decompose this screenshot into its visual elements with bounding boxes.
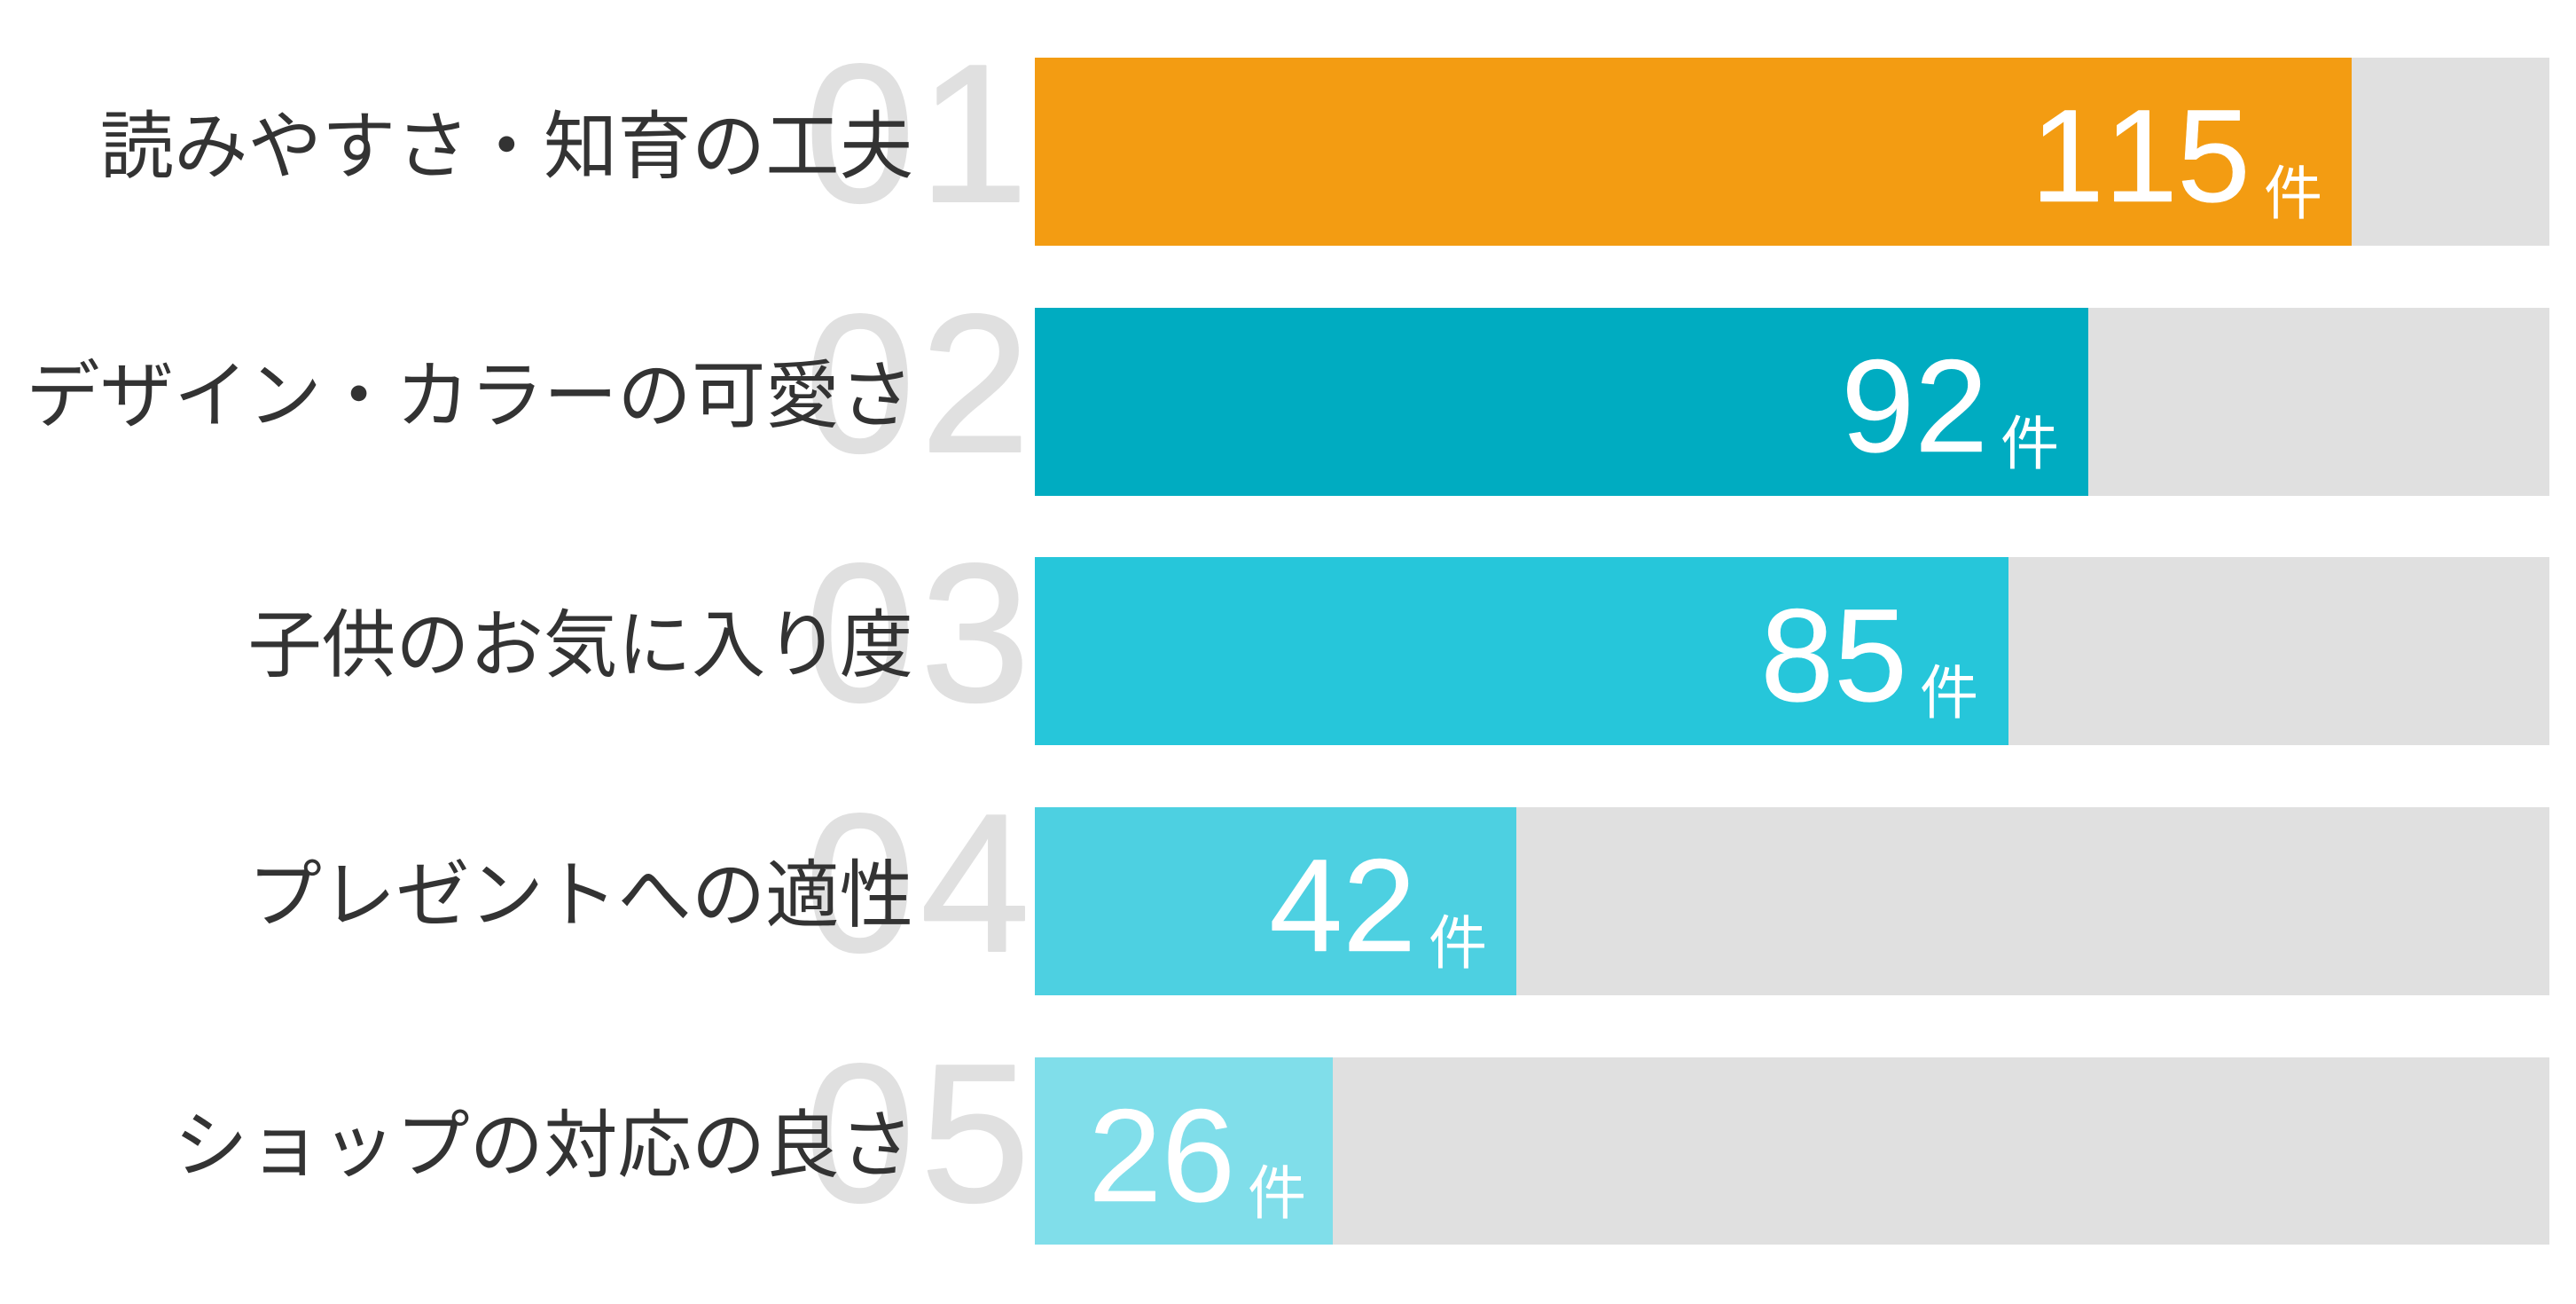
bar track 5 xyxy=(1035,1057,2549,1245)
bar fill 26 xyxy=(1035,1057,1333,1245)
rank number 04: 04 xyxy=(805,774,1030,994)
rank number 01: 01 xyxy=(805,24,1028,244)
bar track 3 xyxy=(1035,557,2549,745)
row 1 xyxy=(100,24,2549,246)
bar fill 115 xyxy=(1035,58,2352,246)
unit: 件 xyxy=(1248,1160,1306,1226)
row 3 xyxy=(247,523,2549,745)
bar fill 42 xyxy=(1035,807,1516,995)
value 92: 92 xyxy=(1841,332,1988,480)
bar fill 92 xyxy=(1035,308,2088,496)
value 42: 42 xyxy=(1269,831,1416,979)
unit: 件 xyxy=(1429,910,1487,976)
rank number 03: 03 xyxy=(805,523,1030,743)
row 5 xyxy=(174,1024,2549,1245)
bar track 4 xyxy=(1035,807,2549,995)
bar track 1 xyxy=(1035,58,2549,246)
label: row 5: ショップの対応の良さ xyxy=(174,1104,913,1187)
value 85: 85 xyxy=(1760,581,1907,729)
label: row 1: 読みやすさ・知育の工夫 xyxy=(100,106,913,188)
bar fill 85 xyxy=(1035,557,2008,745)
label: row 4: プレゼントへの適性 xyxy=(247,854,913,937)
label: row 2: デザイン・カラーの可愛さ xyxy=(26,355,913,437)
label: row 3: 子供のお気に入り度 xyxy=(247,604,913,687)
rank number 02: 02 xyxy=(805,274,1030,494)
rank number 05: 05 xyxy=(805,1024,1030,1244)
row 4 xyxy=(247,774,2549,995)
value 115: 115 xyxy=(2031,82,2251,230)
bar track 2 xyxy=(1035,308,2549,496)
unit: 件 xyxy=(2001,411,2059,476)
unit: 件 xyxy=(1920,660,1978,726)
value 26: 26 xyxy=(1088,1081,1235,1229)
unit: 件 xyxy=(2264,161,2322,226)
row 2 xyxy=(26,274,2549,496)
